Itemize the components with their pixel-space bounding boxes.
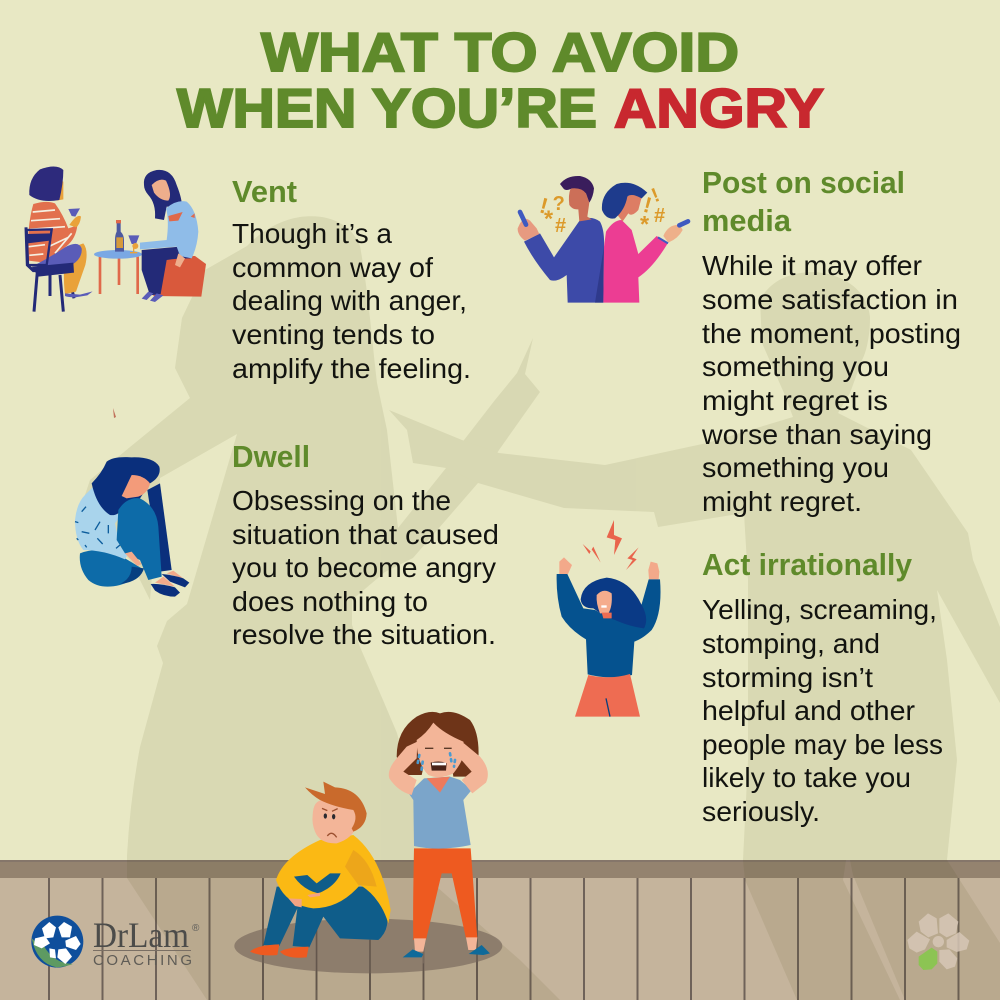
section: Post on social media: Post on social [702,165,905,200]
girl [389,712,490,957]
silhouette: left figure [80,216,560,1000]
symbols: ? [553,193,565,215]
text: Post body: might regret is [702,385,888,416]
text: Vent body [232,218,471,384]
section: Dwell: Dwell [232,439,310,474]
symbols: * [544,206,554,232]
symbols [537,184,665,237]
text: Vent body: venting tends to [232,319,435,350]
illustration: woman hugging knees [75,457,189,597]
title: WHAT TO AVOID [261,21,739,83]
text: Vent body: Though it’s a [232,218,393,249]
text: Dwell body: does nothing to [232,586,428,617]
text: Act body: Yelling, screaming, [702,594,937,625]
boy [250,782,391,958]
illustration: two women talking at table [26,166,206,312]
illustration: angry woman with raised arms [557,520,661,717]
text: Vent body: amplify the feeling. [232,353,471,384]
silhouette: right figure [389,272,1000,1000]
text: Post body: the moment, posting [702,318,961,349]
text: Post body: worse than saying [701,419,932,450]
wall shadow: two arguing silhouettes [80,216,1000,1000]
section: Vent [232,174,471,384]
floor [0,860,1000,1000]
text: Dwell body: resolve the situation. [232,619,496,650]
title: WHEN YOU’RE [177,77,597,139]
text: Post body: something you [702,452,889,483]
floor shadow ellipse [234,919,502,973]
text: Vent body: dealing with anger, [232,285,467,316]
illustration: red speck [113,408,116,418]
text: Post body [701,250,961,517]
text: Post body: While it may offer [702,250,922,281]
section: Act irrationally [702,547,943,827]
title [177,21,824,139]
text: Act body: storming isn’t [702,662,873,693]
text: Act body: likely to take you [702,762,911,793]
symbols: ! [641,192,654,218]
watermark flower [907,913,969,970]
lightning bolts [583,520,639,570]
text: Act body: people may be less [702,729,943,760]
text: Dwell body: situation that caused [232,519,499,550]
symbols: # [654,205,665,227]
logo: DrLam Coaching: COACHING [93,952,192,969]
symbols: * [640,211,650,237]
section: Act irrationally: Act irrationally [702,547,913,582]
section: Post on social media: media [702,203,792,238]
text: Dwell body [232,485,499,650]
symbols: ! [648,184,663,207]
symbols: ! [537,193,551,219]
text: Act body [702,594,943,827]
text: Act body: stomping, and [702,628,880,659]
text: Dwell body: you to become angry [232,552,496,583]
title: ANGRY [614,77,824,139]
logo: DrLam Coaching: DrLam [93,915,189,955]
text: Act body: seriously. [702,796,820,827]
logo: DrLam Coaching: ® [192,923,200,934]
text: Dwell body: Obsessing on the [232,485,451,516]
illustration: couple back to back on phones [518,176,688,303]
text: Post body: might regret. [702,486,862,517]
symbols: # [555,215,566,237]
illustration: sitting boy and crying girl [234,712,502,990]
text: Post body: something you [702,351,889,382]
text: Vent body: common way of [232,252,433,283]
section: Vent: Vent [232,174,297,209]
section: Post on social media [701,165,961,517]
section: Dwell [232,439,499,650]
logo: DrLam Coaching [31,915,200,969]
text: Act body: helpful and other [702,695,915,726]
text: Post body: some satisfaction in [702,284,958,315]
logo mark [31,916,83,968]
